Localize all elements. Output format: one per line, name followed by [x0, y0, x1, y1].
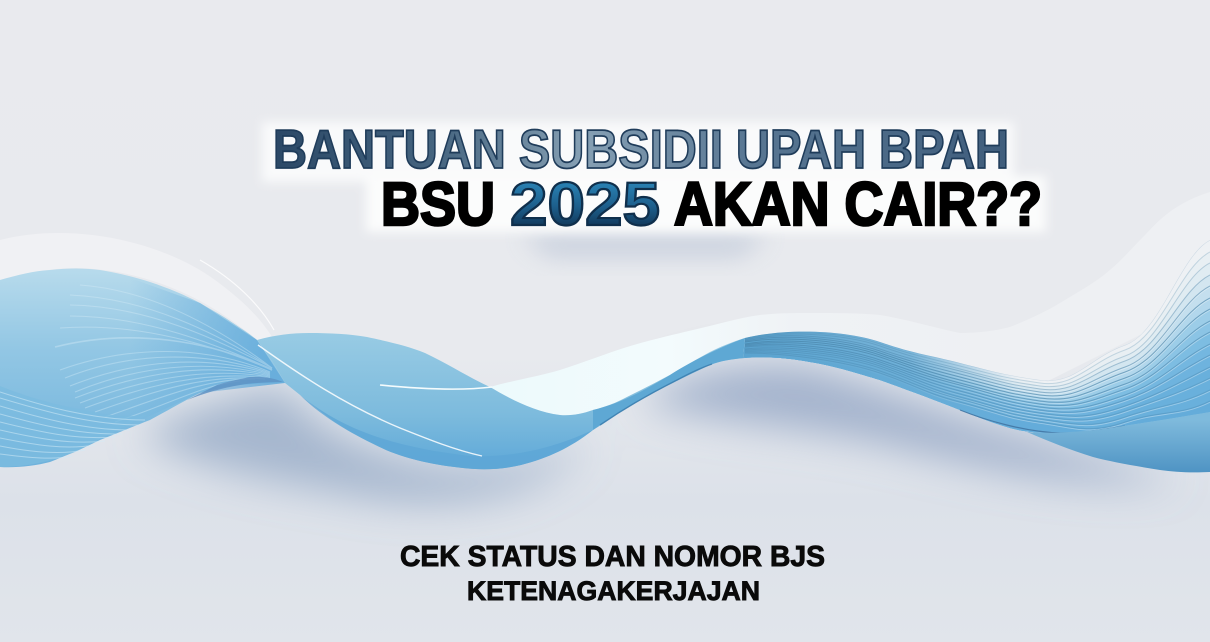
right fan fill layers	[743, 264, 1210, 433]
subtitle line 1: CEK STATUS DAN NOMOR BJS	[400, 541, 825, 573]
left fan lower lines	[60, 351, 270, 422]
subtitle line 2: KETENAGAKERJAJAN	[467, 576, 760, 606]
right fan lines	[745, 240, 1210, 429]
white swoosh behind left wave	[0, 233, 274, 340]
center lower shade	[300, 395, 593, 469]
left fan saturation	[130, 278, 285, 425]
title backdrop	[262, 122, 1046, 232]
left fan sheet lines	[0, 392, 145, 458]
left fan upper lines	[55, 285, 272, 370]
title line 2: BSU: BSU	[381, 170, 495, 238]
title shadow	[520, 236, 770, 256]
left fan lower blue sheet	[0, 386, 150, 467]
right fan blue fade	[743, 332, 1012, 414]
left fan dark wedge	[187, 377, 283, 400]
right fan highlights	[910, 287, 1210, 430]
title line 1: BANTUAN SUBSIDII UPAH BPAH	[273, 118, 1009, 180]
title line 2: 2025: 2025	[510, 170, 660, 238]
center blue connector shade	[593, 338, 745, 430]
title line 2: AKAN CAIR: AKAN CAIR??	[674, 170, 1042, 238]
center white highlight line	[258, 345, 482, 456]
wave: white ribbon	[490, 192, 1210, 415]
center dark lower edge	[600, 364, 712, 425]
wave: right fan	[743, 240, 1210, 433]
wave: lower right blue	[1027, 412, 1210, 472]
title	[273, 118, 1042, 238]
subtitle	[400, 541, 825, 606]
thin white arc	[200, 260, 274, 330]
center white short highlight	[380, 385, 492, 389]
soft shadows under wave	[140, 363, 1180, 502]
right fan lower dark edge	[960, 410, 1125, 433]
wave: center blue	[257, 333, 745, 469]
wave: left fan	[0, 268, 285, 467]
